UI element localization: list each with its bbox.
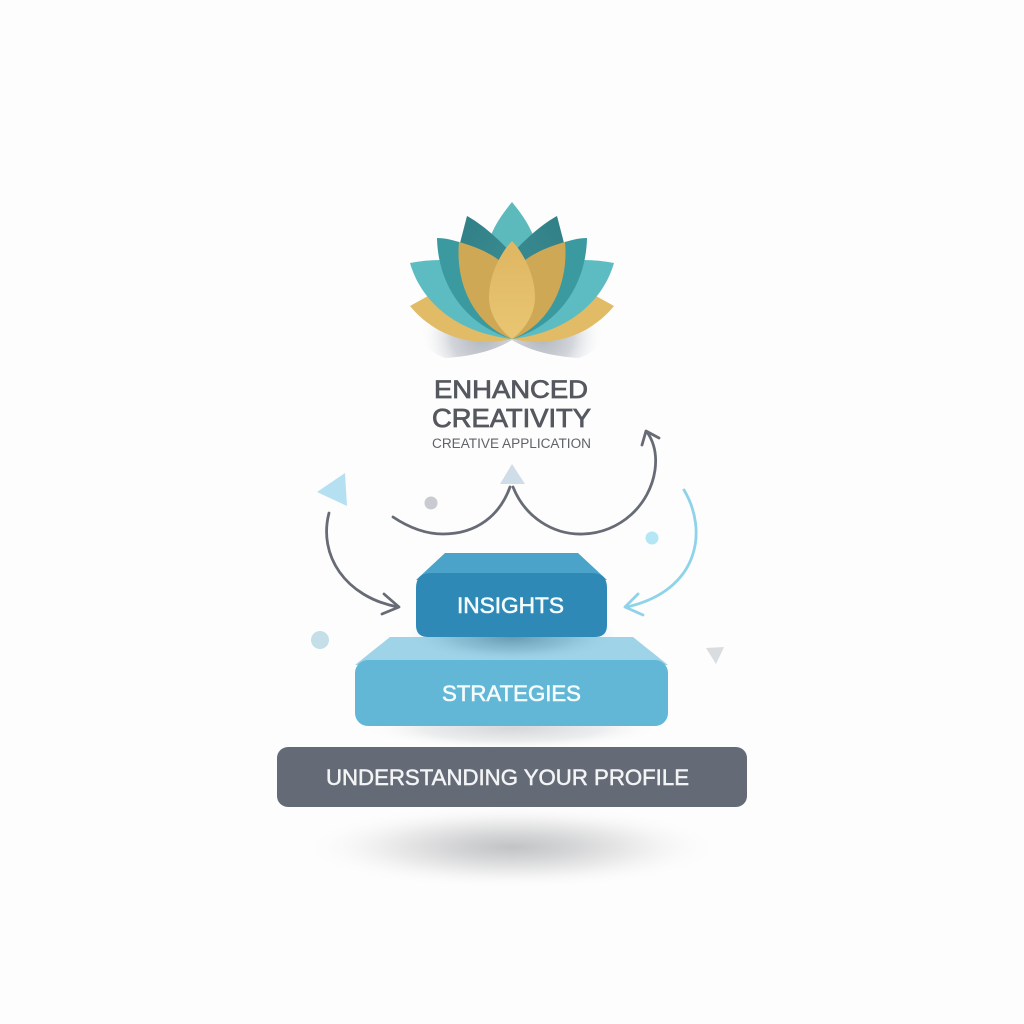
left petals	[410, 216, 512, 342]
arrow: right upward curve	[513, 431, 659, 534]
icon: light blue dot	[646, 532, 658, 544]
arrow: right loop into insights	[625, 490, 696, 615]
strategies front face	[355, 660, 668, 726]
subheading: creative application: CREATIVE APPLICATION	[432, 436, 591, 451]
arrow: left upward curve	[393, 487, 510, 534]
centre petal	[489, 241, 535, 339]
heading: enhanced creativity	[432, 376, 591, 433]
strategies shadow	[362, 706, 662, 750]
top petal	[491, 202, 533, 262]
icon: pale blue dot	[311, 631, 329, 649]
icon: grey triangle	[706, 647, 724, 664]
right petals	[512, 216, 614, 342]
insights front face	[416, 573, 607, 637]
strategies label: STRATEGIES	[442, 681, 581, 706]
bar	[277, 747, 747, 807]
arrow: left loop into insights	[327, 513, 399, 614]
icon: centre triangle	[500, 464, 525, 484]
heading: enhanced creativity: CREATIVITY	[432, 403, 591, 433]
lotus shadow	[414, 322, 610, 358]
insights top face	[416, 553, 607, 580]
icon: lotus	[410, 202, 614, 358]
heading: enhanced creativity: ENHANCED	[434, 376, 588, 404]
block: insights	[416, 553, 607, 637]
icon: left triangle	[317, 473, 347, 506]
insights label: INSIGHTS	[457, 593, 564, 618]
bar label: UNDERSTANDING YOUR PROFILE	[326, 765, 689, 790]
icon: grey dot	[424, 496, 438, 510]
strategies top face	[355, 637, 668, 665]
block: strategies	[355, 610, 668, 726]
block: understanding your profile	[277, 747, 747, 807]
shadow cast by insights	[407, 610, 617, 662]
ground shadow	[302, 805, 722, 889]
